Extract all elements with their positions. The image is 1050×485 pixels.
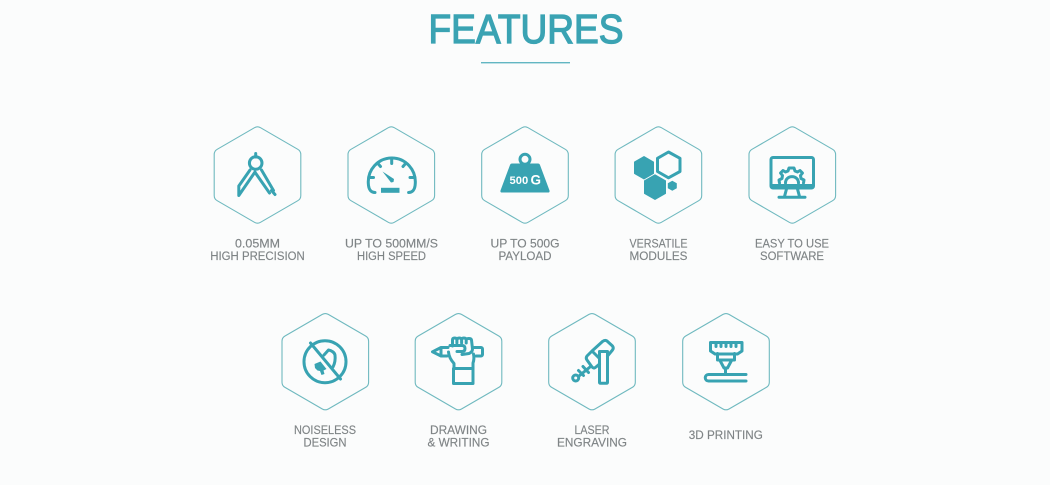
label	[755, 237, 829, 263]
hexagon frame	[683, 314, 769, 410]
label: VERSATILE	[630, 237, 688, 251]
hexagon frame	[482, 127, 568, 223]
icon: muted horn	[304, 341, 346, 383]
label: & WRITING	[428, 435, 490, 449]
label: DRAWING	[430, 423, 487, 437]
feature: high speed	[345, 127, 438, 263]
icon: laser engraver	[573, 340, 613, 383]
title underline	[481, 62, 570, 63]
feature: laser engraving	[549, 314, 635, 449]
hexagon frame	[348, 127, 435, 223]
label	[428, 423, 490, 449]
label: MODULES	[630, 249, 688, 263]
title: FEATURES	[428, 6, 624, 52]
label: HIGH SPEED	[357, 249, 426, 263]
label: UP TO 500MM/S	[345, 237, 438, 251]
icon: compass	[239, 154, 275, 196]
label: EASY TO USE	[755, 237, 829, 251]
feature: noiseless	[282, 314, 369, 449]
icon: monitor with gear	[771, 158, 814, 197]
label: SOFTWARE	[760, 249, 824, 263]
icon: hexagon modules	[634, 152, 680, 200]
hexagon frame	[415, 314, 502, 410]
label: UP TO 500G	[490, 237, 560, 251]
label: PAYLOAD	[498, 249, 552, 263]
label	[557, 423, 627, 449]
hexagon frame	[282, 314, 369, 410]
icon: speedometer	[368, 158, 415, 193]
label	[630, 237, 688, 263]
label: ENGRAVING	[557, 435, 627, 449]
hexagon frame	[749, 127, 836, 223]
label	[345, 237, 438, 263]
hexagon frame	[615, 127, 702, 223]
label	[294, 423, 356, 449]
label: NOISELESS	[294, 423, 356, 437]
icon: 500g weight: G	[530, 172, 541, 188]
feature: drawing	[415, 314, 502, 449]
label: 3D PRINTING	[689, 428, 763, 442]
feature: high precision	[210, 127, 305, 263]
hexagon frame	[214, 127, 301, 223]
hexagon frame	[549, 314, 635, 410]
label: LASER	[574, 423, 610, 437]
icon: hand holding pen	[432, 338, 482, 384]
label: DESIGN	[304, 435, 346, 449]
feature: payload	[482, 127, 568, 263]
label	[490, 237, 560, 263]
icon: 3d printer nozzle	[705, 342, 746, 381]
icon: 500g weight	[500, 154, 550, 192]
feature: software	[749, 127, 836, 263]
label	[210, 237, 305, 263]
icon: 500g weight: 500	[510, 175, 528, 187]
feature: 3d printing	[683, 314, 769, 442]
label: HIGH PRECISION	[210, 249, 305, 263]
label: 0.05MM	[235, 237, 280, 251]
feature: modules	[615, 127, 702, 263]
